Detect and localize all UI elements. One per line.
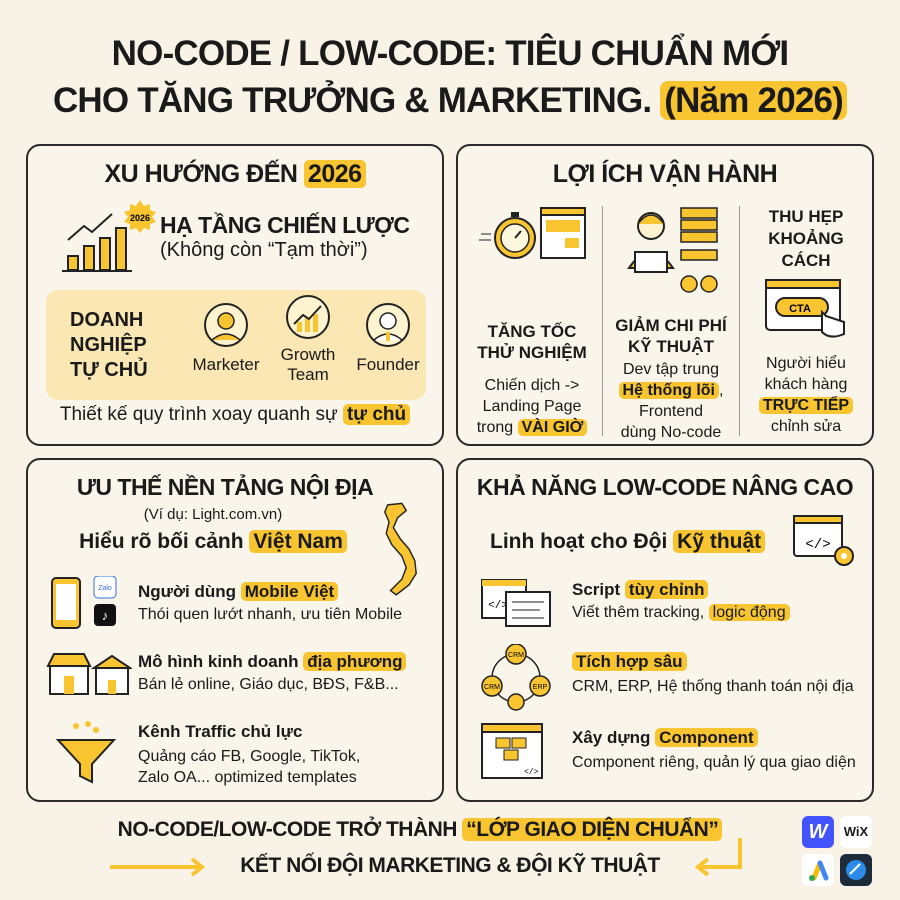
item: traffic: Kênh Traffic chủ lực xyxy=(138,722,302,741)
label xyxy=(70,309,148,381)
text: ha tang: (Không còn “Tạm thời”) xyxy=(160,239,368,261)
icon: growth chart xyxy=(62,200,156,272)
subheading: Linh hoạt cho Đội Kỹ thuật xyxy=(490,530,761,553)
item: component: Component riêng, quản lý qua giao diện xyxy=(572,754,856,771)
item: script: Script tùy chỉnh xyxy=(572,580,704,599)
item: component: Xây dựng Component xyxy=(572,728,754,747)
arrow: right xyxy=(694,838,742,876)
logo: wix xyxy=(840,816,872,848)
line 2: KẾT NỐI ĐỘI MARKETING & ĐỘI KỸ THUẬT xyxy=(240,854,660,877)
logo: webflow: W xyxy=(809,821,827,843)
subtext: (Ví dụ: Light.com.vn) xyxy=(144,506,282,523)
logo: google ads xyxy=(802,854,834,886)
column 2: KỸ THUẬT xyxy=(628,337,714,356)
column 1: trong VÀI GIỜ xyxy=(477,419,583,436)
text: ha tang xyxy=(160,212,410,261)
box: doanh nghiep tu chu xyxy=(46,290,426,400)
item: tich hop: CRM xyxy=(508,652,524,659)
icon: code gear xyxy=(793,515,854,566)
column 2: Dev tập trung xyxy=(623,361,719,378)
item: mobile: Người dùng Mobile Việt xyxy=(138,582,334,601)
column 3: THU HẸP xyxy=(769,207,843,226)
item: tich hop: CRM, ERP, Hệ thống thanh toán nội địa xyxy=(572,678,854,695)
column 3: chỉnh sửa xyxy=(771,418,841,435)
icon: code gear: </> xyxy=(805,537,831,553)
item: script: Viết thêm tracking, logic động xyxy=(572,604,786,621)
icon: developer + server xyxy=(627,207,718,293)
icon: growth team xyxy=(281,295,335,384)
label: DOANH xyxy=(70,309,143,331)
column 3: KHOẢNG xyxy=(768,229,844,248)
icon: stopwatch + page xyxy=(479,207,586,259)
heading: ƯU THẾ NỀN TẢNG NỘI ĐỊA xyxy=(77,474,373,500)
item: local business: Mô hình kinh doanh địa phương xyxy=(138,652,402,671)
panel: uu the noi dia xyxy=(26,458,444,802)
logo: webflow xyxy=(802,816,834,848)
heading: XU HƯỚNG ĐẾN 2026 xyxy=(104,160,362,188)
item: component: </> xyxy=(524,768,539,777)
footer statement xyxy=(110,816,742,877)
column 3: Người hiểu xyxy=(766,355,846,372)
item: local business xyxy=(46,652,406,695)
icon: founder xyxy=(356,303,420,374)
title: CHO TĂNG TRƯỞNG & MARKETING. (Năm 2026) xyxy=(53,81,843,120)
column 1: Landing Page xyxy=(483,398,581,415)
item: local business: Bán lẻ online, Giáo dục, BĐS, F&B... xyxy=(138,676,399,693)
icon: growth team: Growth xyxy=(281,345,335,364)
heading: LỢI ÍCH VẬN HÀNH xyxy=(553,160,777,188)
column 3: TRỰC TIẾP xyxy=(763,397,849,414)
icon: marketer: Marketer xyxy=(192,355,260,374)
column 3: khách hàng xyxy=(765,376,847,393)
icon: founder: Founder xyxy=(356,355,420,374)
item: tich hop: Tích hợp sâu xyxy=(576,652,683,671)
column 3: CÁCH xyxy=(781,251,831,270)
item: mobile: ♪ xyxy=(102,608,108,623)
panel: loi ich van hanh xyxy=(456,144,874,446)
item: tich hop: CRM xyxy=(484,684,500,691)
panel: low-code nang cao xyxy=(456,458,874,802)
text: thiet ke quy trinh: Thiết kế quy trình xoay quanh sự tự chủ xyxy=(60,404,406,425)
item: script xyxy=(481,579,790,627)
item: component xyxy=(481,723,856,779)
line 1: NO-CODE/LOW-CODE TRỞ THÀNH “LỚP GIAO DIỆN CHUẨN” xyxy=(118,818,718,841)
icon: CTA click: CTA xyxy=(789,303,811,315)
column 1: TĂNG TỐC xyxy=(488,322,576,341)
label: TỰ CHỦ xyxy=(70,359,148,381)
item: tich hop: ERP xyxy=(533,684,548,691)
column 2: Frontend xyxy=(639,403,703,420)
column 1: THỬ NGHIỆM xyxy=(477,343,587,362)
column 2: Hệ thống lõi, xyxy=(623,382,723,399)
item: mobile: Zalo xyxy=(98,585,112,592)
subheading: Hiểu rõ bối cảnh Việt Nam xyxy=(79,530,343,553)
item: mobile xyxy=(51,576,402,629)
column 3 xyxy=(759,207,853,435)
item: mobile: Thói quen lướt nhanh, ưu tiên Mobile xyxy=(138,606,402,623)
logo: ladipage xyxy=(840,854,872,886)
panel: xu huong xyxy=(26,144,444,446)
column 1: Chiến dịch -> xyxy=(485,377,579,394)
icon: CTA click xyxy=(765,279,845,338)
item: tich hop xyxy=(481,644,854,711)
logos xyxy=(802,816,872,886)
column 2: dùng No-code xyxy=(621,424,721,441)
icon: growth team: Team xyxy=(287,365,329,384)
item: traffic: Zalo OA... optimized templates xyxy=(138,769,357,786)
item: traffic xyxy=(56,721,360,786)
label: NGHIỆP xyxy=(70,334,147,356)
text: ha tang: HẠ TẦNG CHIẾN LƯỢC xyxy=(160,212,409,238)
heading: KHẢ NĂNG LOW-CODE NÂNG CAO xyxy=(477,474,853,500)
logo: wix: WiX xyxy=(844,824,868,839)
column 2 xyxy=(602,206,740,436)
column 2: GIẢM CHI PHÍ xyxy=(615,316,727,335)
item: traffic: Quảng cáo FB, Google, TikTok, xyxy=(138,748,360,765)
item: script: </> xyxy=(488,600,508,612)
icon: growth chart: 2026 xyxy=(130,213,150,223)
title xyxy=(53,33,847,120)
arrow: left xyxy=(110,858,206,876)
column 1 xyxy=(477,207,587,436)
icon: vietnam map xyxy=(384,502,417,596)
icon: marketer xyxy=(192,303,260,374)
title: NO-CODE / LOW-CODE: TIÊU CHUẨN MỚI xyxy=(112,34,788,73)
